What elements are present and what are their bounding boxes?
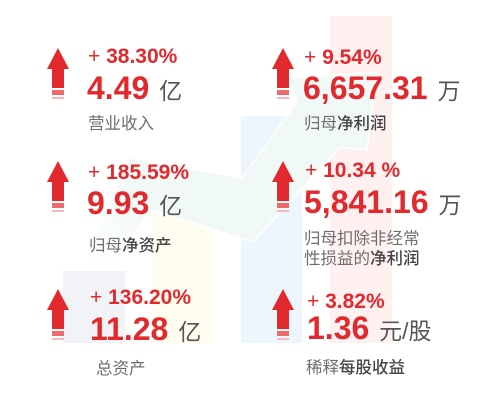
icon: up arrow [47,161,69,212]
label: 性损益的净利润 [304,250,420,268]
metric: net profit [272,46,460,133]
change percent: + 38.30% [88,45,177,68]
change percent: + 136.20% [90,286,191,309]
change percent: + 9.54% [304,46,382,69]
bar: yellow [152,209,214,343]
label: 稀释每股收益 [306,359,405,377]
trend arrow outline [130,72,377,242]
label: 归母净利润 [304,115,386,133]
value: 6,657.31 万 [303,70,460,106]
bar: pink [330,16,392,343]
metric: diluted EPS [272,289,432,377]
metric: total assets [47,286,201,378]
value: 11.28 亿 [90,311,201,347]
bar: blue [241,116,302,343]
label: 归母净资产 [89,237,172,255]
value: 5,841.16 万 [304,184,461,220]
icon: up arrow [272,161,294,212]
label [304,230,420,268]
change percent: + 10.34 % [305,159,400,182]
bar: gray [63,271,125,343]
label: 营业收入 [88,115,154,133]
change percent: + 185.59% [88,161,189,184]
metric: revenue [47,45,182,133]
value: 1.36 元/股 [307,310,432,346]
icon: up arrow [272,48,294,99]
metric: net profit after deductions [272,159,461,268]
icon: up arrow [272,289,294,340]
label: 归母扣除非经常 [304,230,420,248]
metric: net assets [47,161,189,255]
value: 9.93 亿 [87,185,182,221]
value: 4.49 亿 [87,70,182,106]
icon: up arrow [47,48,69,99]
trend arrow [85,72,377,270]
change percent: + 3.82% [307,290,385,313]
icon: up arrow [47,289,69,340]
label: 总资产 [96,360,146,378]
